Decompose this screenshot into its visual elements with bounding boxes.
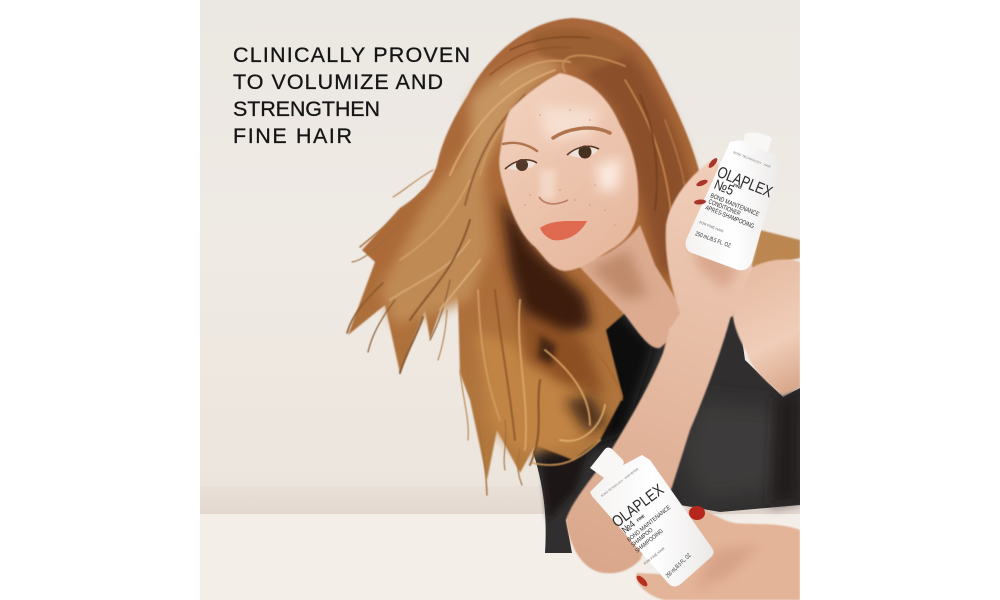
hand holding bottle [666, 160, 762, 332]
raised forearm [566, 312, 732, 573]
studio backdrop [200, 0, 800, 600]
nose [539, 197, 568, 204]
lips [540, 221, 587, 240]
bottle: No.4 shampoo: FINE [635, 513, 646, 523]
black sleeveless dress [533, 313, 800, 553]
bottle: No.4 shampoo: OLAPLEX [609, 481, 668, 531]
bottle: No.5 conditioner: BOND TECHNOLOGY · HAIR [733, 150, 772, 169]
bottle: No.4 shampoo: FOR FINE HAIR [643, 546, 666, 566]
bottle: No.5 conditioner: CONDITIONER [707, 198, 742, 218]
bottle: No.5 conditioner: №5 [712, 176, 737, 198]
headline: CLINICALLY PROVEN [233, 43, 470, 67]
freckles [524, 109, 616, 226]
headline: FINE HAIR [233, 124, 352, 148]
headline: STRENGTHEN [233, 97, 380, 121]
bottle: No.4 shampoo [590, 448, 714, 586]
shadow under chin [590, 250, 648, 300]
bottle: No.4 shampoo: 250 mL/8.5 FL. OZ [665, 553, 693, 579]
hair strands [347, 37, 688, 495]
eyebrows [503, 128, 610, 151]
bottle: No.5 conditioner: OLAPLEX [715, 164, 775, 202]
lower hand [635, 506, 800, 600]
flowing red hair [347, 18, 705, 495]
eyes [505, 146, 599, 171]
bottle: No.5 conditioner: FINE [733, 182, 743, 190]
bottle: No.4 shampoo: BOND MAINTENANCE [626, 505, 672, 544]
bottle: No.4 shampoo: SHAMPOOING [634, 528, 665, 555]
bottle: No.5 conditioner: BOND MAINTENANCE [709, 192, 761, 219]
bottle: No.5 conditioner: FOR FINE HAIR [699, 220, 724, 234]
bottle: No.5 conditioner: APRÈS-SHAMPOOING [704, 203, 756, 230]
headline: TO VOLUMIZE AND [233, 70, 443, 94]
bottle: No.4 shampoo: №4 [620, 519, 638, 536]
neck and chest [580, 224, 680, 350]
bottle: No.4 shampoo: BOND TECHNOLOGY · HAIR REPAIR [600, 466, 640, 498]
bottle: No.5 conditioner [686, 133, 781, 270]
shoulder and upper arm [733, 259, 800, 395]
bottle: No.4 shampoo: SHAMPOO [630, 527, 655, 549]
face [499, 73, 638, 271]
finger nails [694, 157, 719, 205]
bottle: No.5 conditioner: 250 mL/8.5 FL. OZ [694, 231, 731, 250]
headline [233, 43, 470, 148]
strand of hair behind the shoulder [751, 230, 800, 268]
photo panel [200, 0, 800, 600]
